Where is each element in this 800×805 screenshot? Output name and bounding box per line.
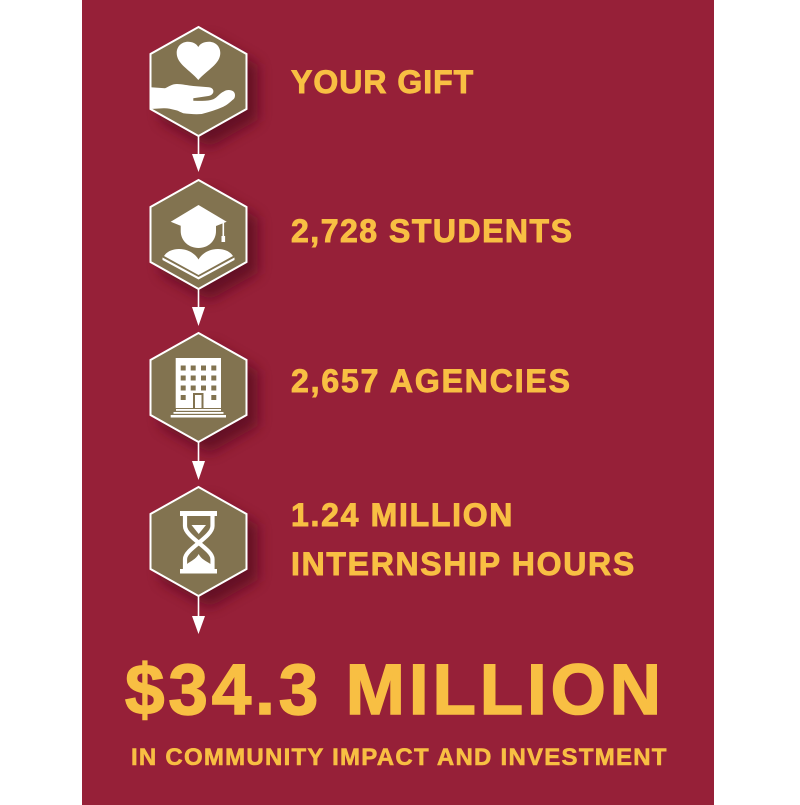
caption: community impact: IN COMMUNITY IMPACT AND INVESTMENT [131, 744, 668, 771]
panel: maroon background [82, 0, 714, 805]
text: internship hours: INTERNSHIP HOURS [291, 546, 636, 582]
headline: total impact: $34.3 MILLION [125, 651, 665, 730]
heading: your gift: YOUR GIFT [291, 64, 474, 100]
icon: graduation cap and book [150, 180, 258, 300]
arrow 3 [192, 442, 205, 480]
text: internship hours: 1.24 MILLION [291, 497, 514, 533]
text: students: 2,728 STUDENTS [291, 213, 573, 249]
text: internship hours [291, 497, 636, 582]
arrow 1 [192, 136, 205, 172]
icon: heart in hand [150, 27, 258, 147]
icon: building [150, 333, 258, 453]
icon: hourglass [150, 487, 258, 607]
arrow 4 [192, 596, 205, 634]
text: agencies: 2,657 AGENCIES [291, 363, 572, 399]
arrow 2 [192, 289, 205, 326]
